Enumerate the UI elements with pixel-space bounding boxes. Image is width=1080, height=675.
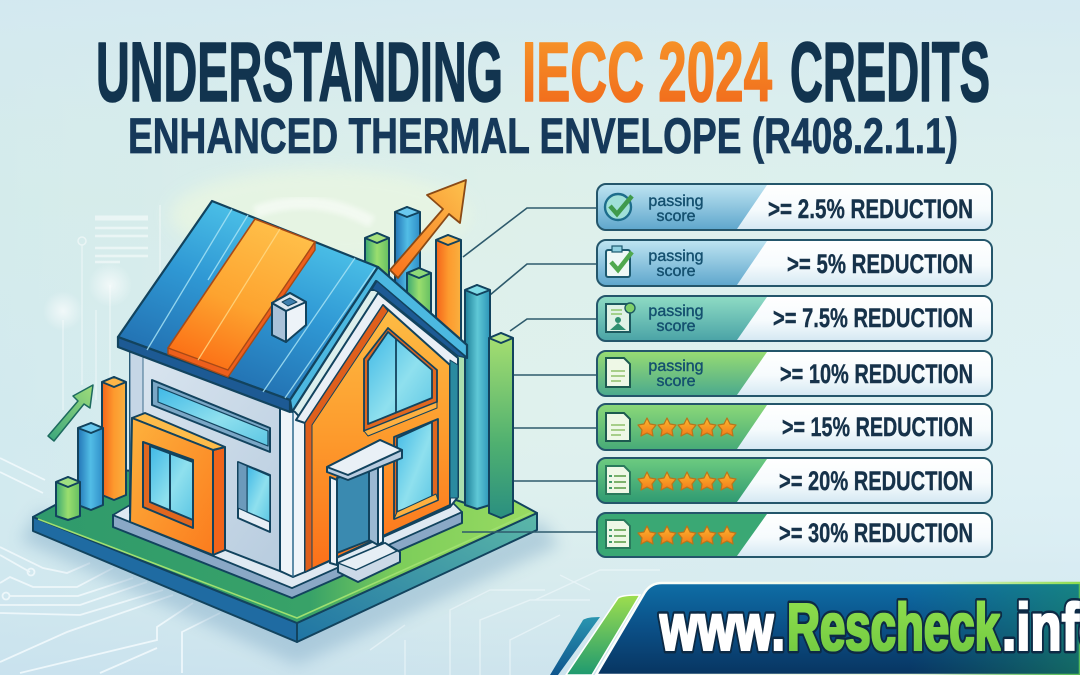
gable window xyxy=(364,328,437,436)
label: passing xyxy=(648,248,704,265)
icon: document xyxy=(606,358,630,387)
title line one: IECC 2024 xyxy=(522,25,772,119)
value: >= 5% REDUCTION xyxy=(787,249,973,279)
value: >= 15% REDUCTION xyxy=(782,412,973,442)
five stars xyxy=(638,418,736,436)
card: 15% xyxy=(597,404,992,450)
banner panel xyxy=(596,583,1080,675)
card: 10% xyxy=(597,351,992,396)
door and porch xyxy=(327,440,402,582)
orange bay window box xyxy=(130,413,225,555)
label: score xyxy=(656,373,696,390)
bottom connector line xyxy=(462,531,597,533)
card: 5% xyxy=(597,240,992,286)
title xyxy=(96,25,990,164)
front bars right xyxy=(450,285,513,518)
orange roof strip xyxy=(168,219,315,375)
label: score xyxy=(656,208,696,225)
card: 30% xyxy=(597,513,992,557)
title line one: UNDERSTANDING xyxy=(96,25,503,119)
icon: clipboard xyxy=(606,246,632,277)
ground shadow xyxy=(20,510,560,665)
value: >= 2.5% REDUCTION xyxy=(768,194,973,224)
lower gable window xyxy=(394,419,438,519)
card: 7.5% xyxy=(597,296,992,341)
card: 20% xyxy=(597,458,992,503)
house illustration xyxy=(20,180,597,665)
green base platform xyxy=(33,470,537,642)
orange growth arrow xyxy=(390,180,466,278)
icon: check badge xyxy=(605,194,632,220)
icon: checklist xyxy=(606,520,630,548)
website address xyxy=(657,598,1080,654)
upper long window xyxy=(152,380,270,452)
label: passing xyxy=(648,358,704,375)
corner trim xyxy=(280,405,305,577)
reduction cards xyxy=(597,184,992,557)
label: passing xyxy=(648,303,704,320)
card: 2.5% xyxy=(597,184,992,230)
icon: checklist xyxy=(606,466,630,494)
small side window xyxy=(238,462,270,532)
footer banner xyxy=(550,583,1080,675)
value: >= 7.5% REDUCTION xyxy=(773,303,973,333)
label: score xyxy=(656,318,696,335)
label: passing xyxy=(648,193,704,210)
orange gable wall xyxy=(296,293,458,572)
foundation xyxy=(113,512,462,598)
left wall xyxy=(130,350,290,575)
icon: document xyxy=(606,413,630,441)
chimney xyxy=(272,293,306,342)
icon: certificate xyxy=(606,303,635,332)
website address: www. xyxy=(659,590,785,665)
value: >= 20% REDUCTION xyxy=(779,466,973,496)
five stars xyxy=(638,472,736,490)
roof fascia xyxy=(290,267,467,412)
value: >= 30% REDUCTION xyxy=(779,518,973,548)
label: score xyxy=(656,263,696,280)
value: >= 10% REDUCTION xyxy=(780,359,973,389)
connector lines xyxy=(463,208,597,481)
back bar chart xyxy=(365,207,461,360)
accent stripes xyxy=(550,595,640,675)
five stars xyxy=(638,526,736,544)
roof xyxy=(118,201,467,412)
left bars xyxy=(56,377,126,520)
green growth arrow xyxy=(48,385,93,441)
